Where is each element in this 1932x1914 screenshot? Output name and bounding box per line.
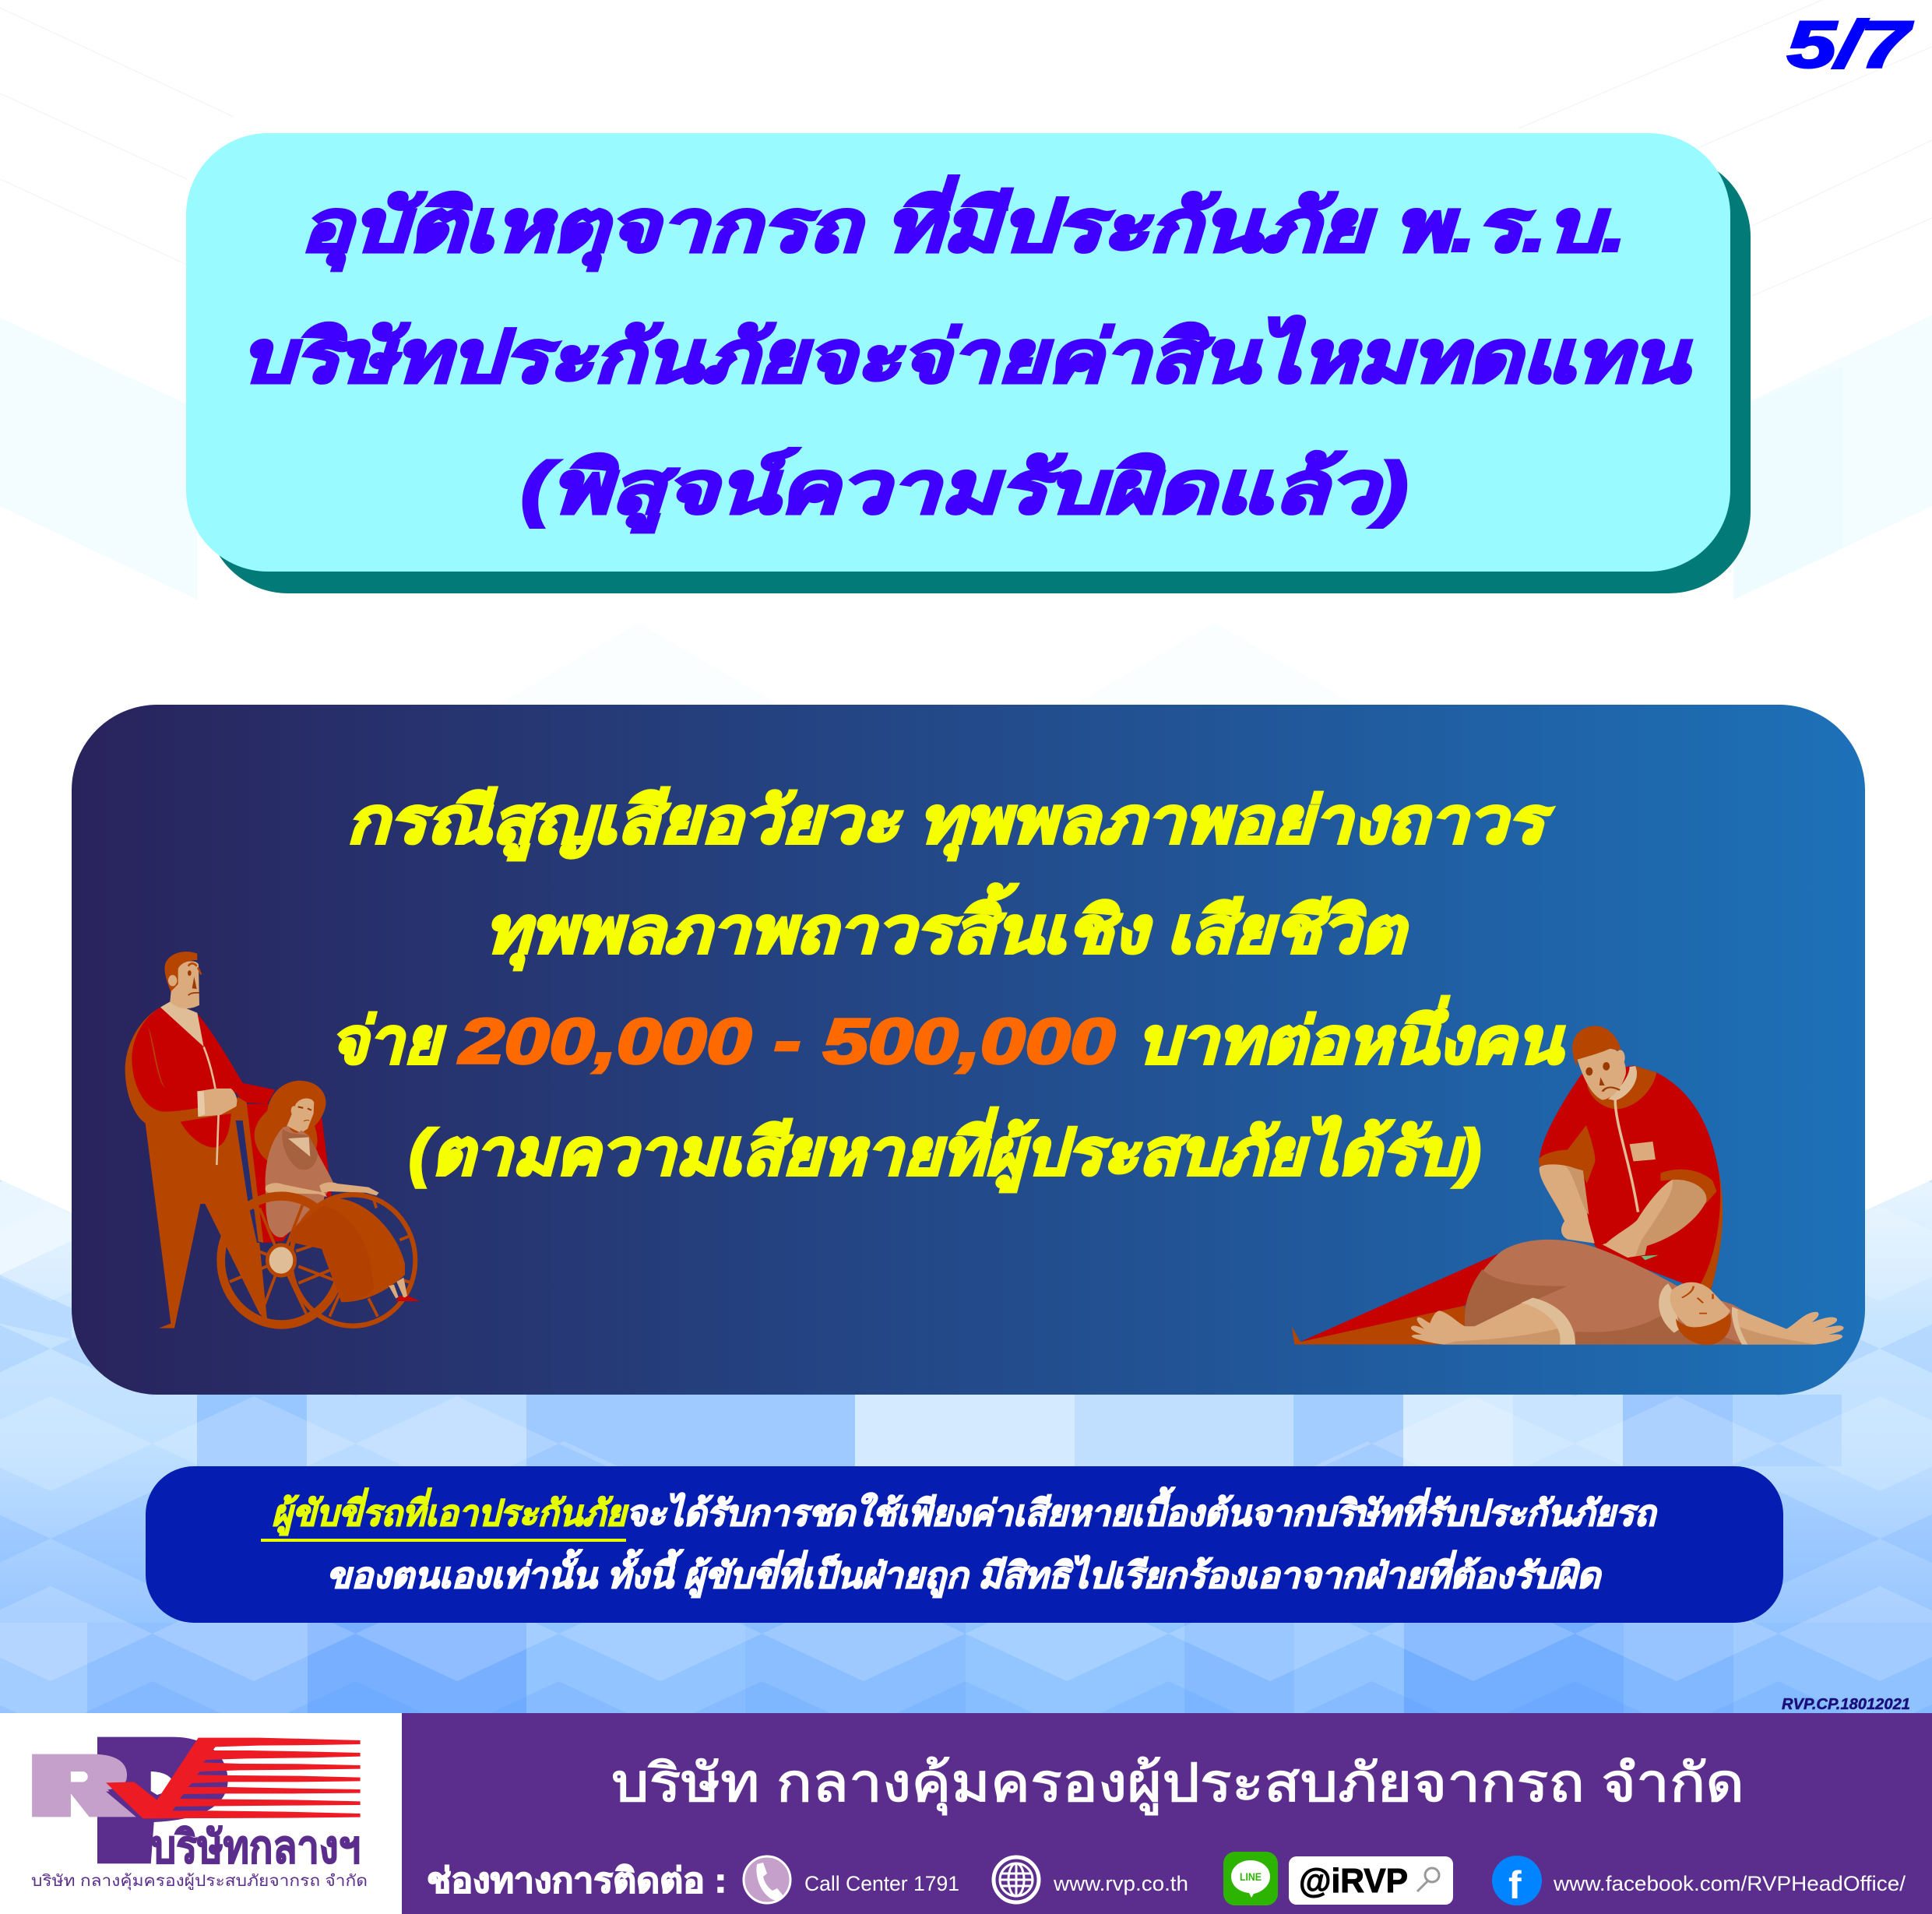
footer: logo area (0, 1713, 402, 1914)
facebook url: www.facebook.com/RVPHeadOffice/ (1553, 1872, 1906, 1895)
panel: compensation (72, 705, 1865, 1395)
text: note body: จะได้รับการชดใช้เพียงค่าเสียหายเบื้องต้นจากบริษัทที่รับประกันภัยรถ (626, 1487, 1658, 1533)
illustration: man pushing woman in wheelchair (125, 952, 420, 1328)
text: compensation amounts: บาทต่อหนึ่งคน (1137, 996, 1564, 1077)
icon: globe (994, 1857, 1039, 1902)
text: note body: ของตนเองเท่านั้น ทั้งนี้ ผู้ขับขี่ที่เป็นฝ่ายถูก มีสิทธิไปเรียกร้องเอาจากฝ่ายที่ต้องรับผิด (326, 1549, 1603, 1598)
call center: Call Center 1791 (804, 1872, 959, 1895)
icon: facebook: f (1508, 1863, 1522, 1907)
text: compensation amounts (330, 786, 1564, 1192)
icon: LINE: LINE (1240, 1870, 1262, 1883)
website: www.rvp.co.th (1053, 1872, 1188, 1895)
icon: LINE (1223, 1852, 1278, 1905)
contact label: ช่องทางการติดต่อ : (427, 1862, 727, 1900)
line id box: @iRVP (1299, 1862, 1408, 1900)
text: compensation amounts: 200,000 - 500,000 (457, 1006, 1115, 1077)
heading: title text (241, 175, 1692, 533)
document code: RVP.CP.18012021 (1782, 1696, 1910, 1713)
line id box (1289, 1856, 1453, 1905)
page number: 5/7 (1787, 8, 1913, 81)
text: compensation amounts: ทุพพลภาพถาวรสิ้นเชิง เสียชีวิต (484, 883, 1409, 970)
logo wordmark: บริษัทกลางฯ (151, 1822, 361, 1873)
panel: title (186, 133, 1751, 593)
logo company name: บริษัท กลางคุ้มครองผู้ประสบภัยจากรถ จำกัด (31, 1873, 368, 1891)
illustration: rescuer performing CPR (1292, 1026, 1844, 1345)
panel: driver note (146, 1466, 1783, 1623)
text: note highlighted: ผู้ขับขี่รถที่เอาประกันภัย (272, 1487, 629, 1536)
icon: facebook (1492, 1856, 1542, 1907)
text: compensation amounts: กรณีสูญเสียอวัยวะ ทุพพลภาพอย่างถาวร (347, 786, 1554, 860)
heading: title text: (พิสูจน์ความรับผิดแล้ว) (521, 448, 1408, 533)
logo mark (32, 1737, 361, 1863)
text: compensation amounts: จ่าย (330, 1006, 446, 1077)
footer company name: บริษัท กลางคุ้มครองผู้ประสบภัยจากรถ จำกัด (611, 1754, 1744, 1815)
icon: phone (744, 1856, 790, 1903)
text: compensation amounts: (ตามความเสียหายที่ผู้ประสบภัยได้รับ) (409, 1107, 1481, 1192)
text: note body (326, 1487, 1658, 1598)
heading: title text: อุบัติเหตุจากรถ ที่มีประกันภัย พ.ร.บ. (300, 175, 1626, 271)
footer: contact bar (402, 1713, 1932, 1914)
heading: title text: บริษัทประกันภัยจะจ่ายค่าสินไหมทดแทน (241, 315, 1692, 397)
